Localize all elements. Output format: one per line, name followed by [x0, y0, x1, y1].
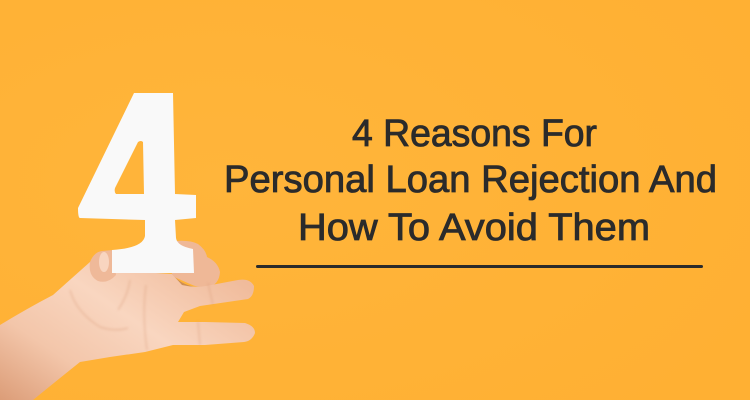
icon: palm and fingers [0, 262, 255, 400]
icon: back fingers [170, 241, 220, 287]
icon: white number 4 [78, 93, 196, 273]
icon: thumbnail [99, 252, 109, 272]
title line 1: 4 Reasons For [352, 113, 597, 155]
title line 2: Personal Loan Rejection And [224, 159, 717, 201]
icon: palm creases [70, 280, 213, 350]
title line 3: How To Avoid Them [298, 207, 650, 249]
icon: knuckle shadow [172, 274, 195, 290]
title [224, 113, 717, 249]
icon: thumb [90, 250, 116, 282]
icon: hand holding number [0, 241, 255, 400]
underline rule [256, 265, 703, 268]
